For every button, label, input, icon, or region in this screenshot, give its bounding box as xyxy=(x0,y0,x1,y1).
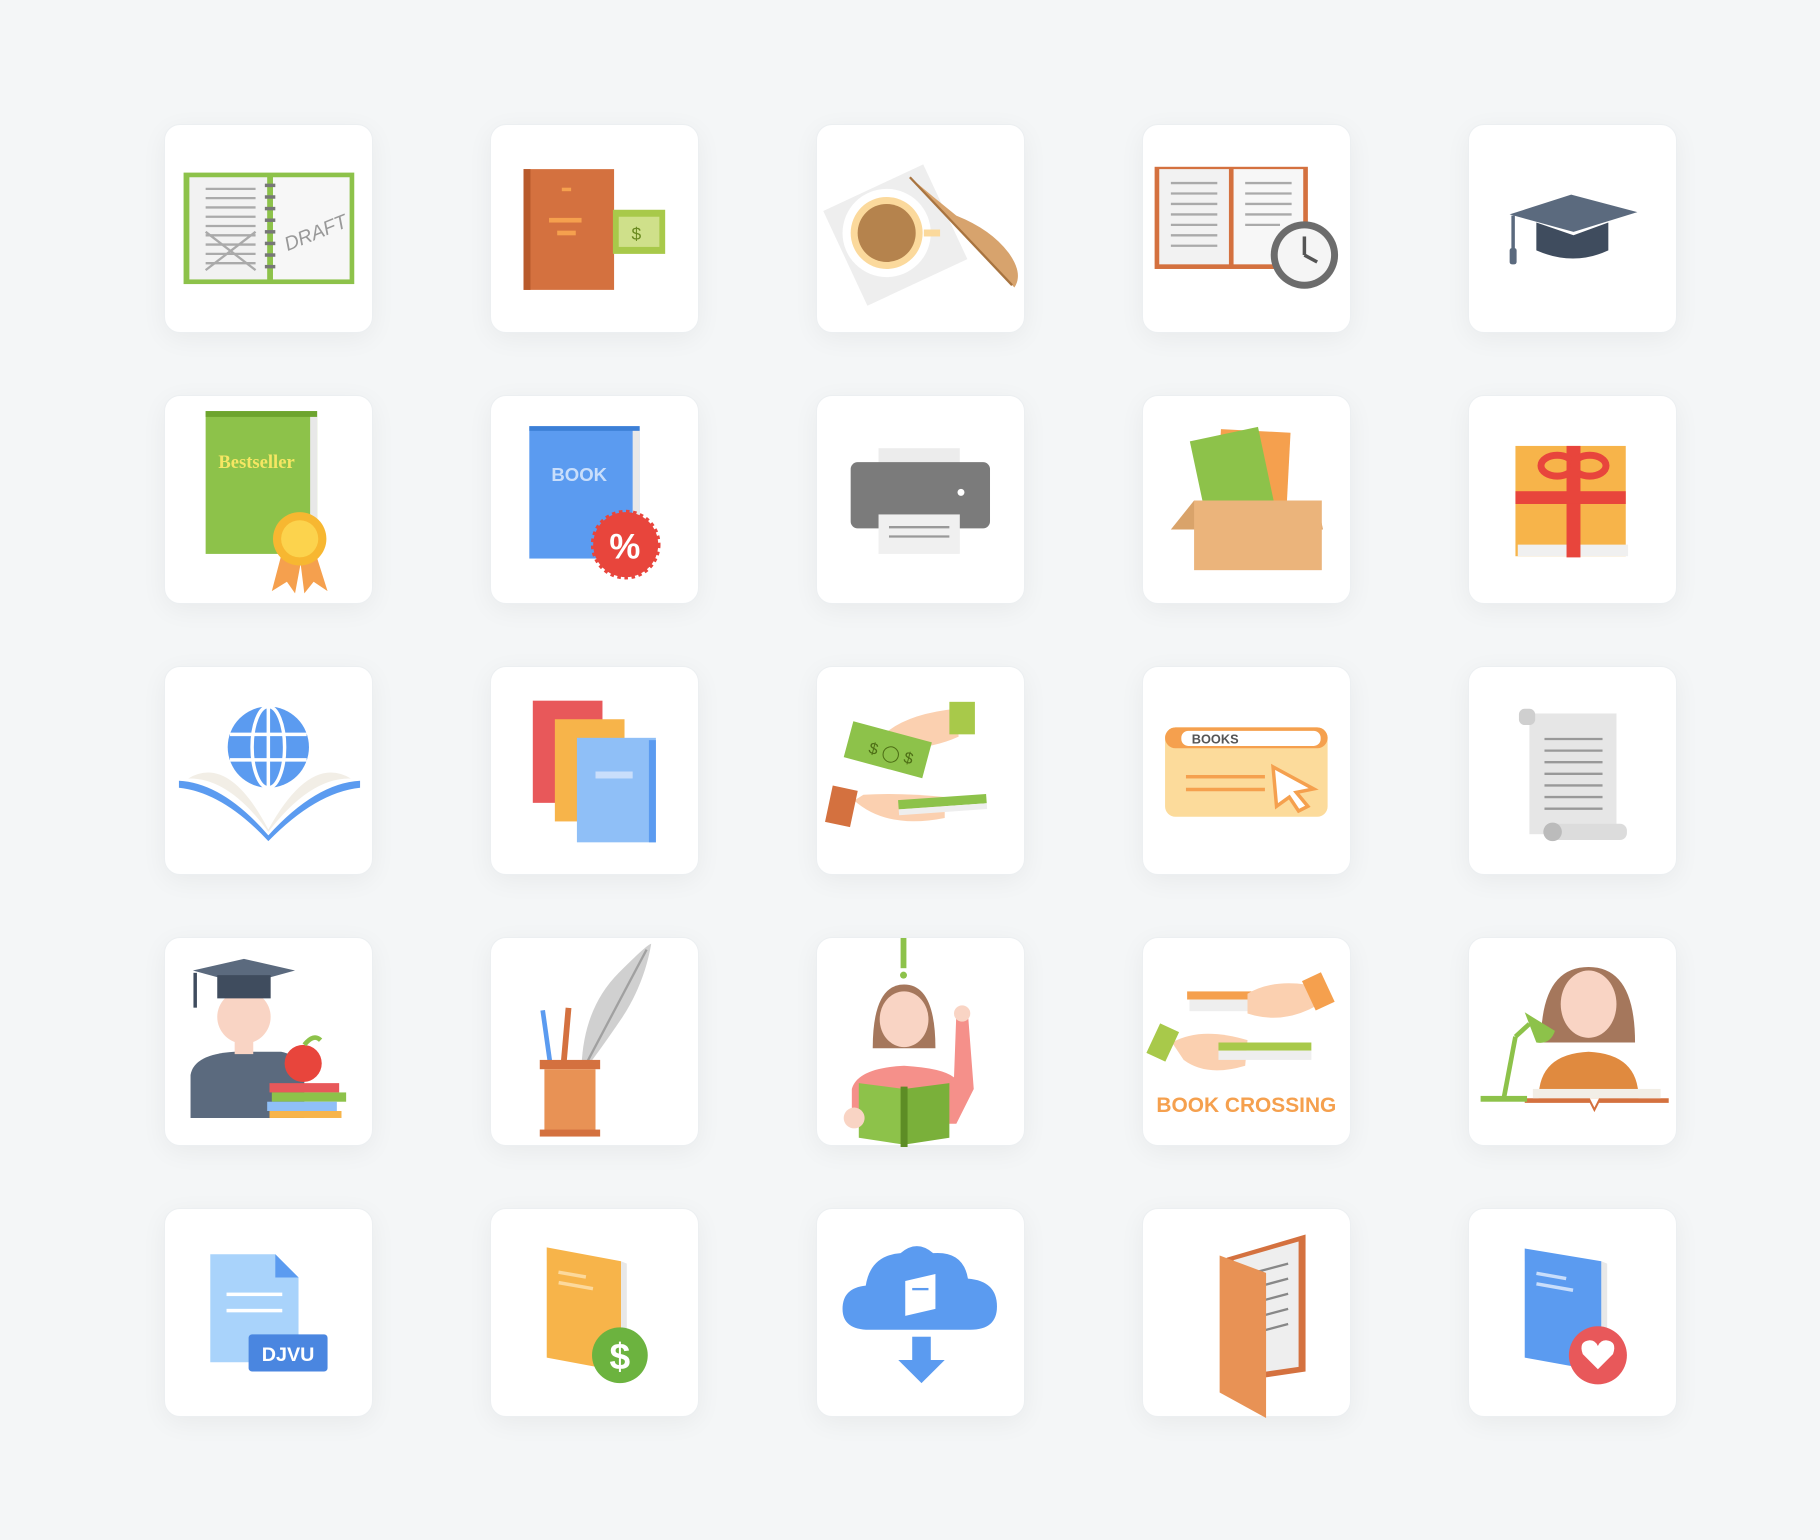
card: book crossing: BOOK CROSSING xyxy=(1156,1094,1336,1117)
card: book with dollar xyxy=(490,1208,699,1417)
card: draft notebook xyxy=(164,124,373,333)
card: book discount: % xyxy=(609,528,640,567)
card: bestseller xyxy=(164,395,373,604)
card: draft notebook: DRAFT xyxy=(281,210,352,256)
card: buying books hands: $ ◯ $ xyxy=(867,739,915,768)
card: book with clock xyxy=(1142,124,1351,333)
card: quill and pencils xyxy=(490,937,699,1146)
card: stacked books xyxy=(490,666,699,875)
card: favorite book xyxy=(1468,1208,1677,1417)
card: scroll xyxy=(1468,666,1677,875)
card: girl reading xyxy=(816,937,1025,1146)
card: book with money xyxy=(490,124,699,333)
card: online books xyxy=(1142,666,1351,875)
card: globe book xyxy=(164,666,373,875)
card: graduate student xyxy=(164,937,373,1146)
card: djvu file: DJVU xyxy=(262,1344,314,1366)
card: woman with lamp xyxy=(1468,937,1677,1146)
card: book crossing xyxy=(1142,937,1351,1146)
card: online books: BOOKS xyxy=(1192,732,1239,747)
card: bestseller: Bestseller xyxy=(218,452,295,473)
card: coffee and feather xyxy=(816,124,1025,333)
card: gift book xyxy=(1468,395,1677,604)
card: printer xyxy=(816,395,1025,604)
card: djvu file xyxy=(164,1208,373,1417)
card: cloud download xyxy=(816,1208,1025,1417)
card: graduation cap xyxy=(1468,124,1677,333)
card: box of books xyxy=(1142,395,1351,604)
card: book with money: $ xyxy=(631,224,641,244)
card: open door book xyxy=(1142,1208,1351,1417)
card: book discount: BOOK xyxy=(551,464,608,485)
card: book discount xyxy=(490,395,699,604)
card: book with dollar: $ xyxy=(610,1335,631,1377)
card: buying books hands xyxy=(816,666,1025,875)
